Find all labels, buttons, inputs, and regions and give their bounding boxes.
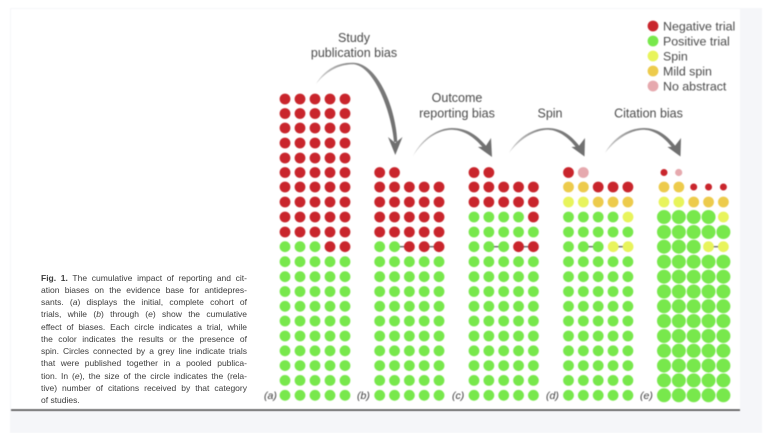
heading: study publication bias [311,31,397,60]
arrow: citation bias [605,128,681,156]
small pink no abstract trial [675,169,682,176]
spin trials [568,202,628,247]
spin trials [664,202,724,247]
pooled publication connectors [489,246,534,248]
green positive trials [380,247,439,395]
red negative trials [285,99,345,247]
caption text block: Fig. 1. The cumulative impact of reporting and cit- [41,272,247,282]
legend item: mild spin: Mild spin [663,64,712,78]
arrow: outcome reporting bias [413,128,492,157]
arrow: spin [509,128,585,156]
red negative trials [380,172,439,247]
arrow: study publication bias [316,63,402,155]
label b: (b) [357,390,370,402]
heading: outcome reporting bias: reporting bias [419,106,495,120]
caption text block: tion. In (e), the size of the circle indicates the (rela- [41,370,247,380]
legend item: no abstract: No abstract [663,80,727,94]
label d: (d) [546,390,559,402]
caption text block [41,272,247,405]
caption text block: that were published together in a pooled publica- [41,358,247,368]
heading: citation bias: Citation bias [614,106,683,120]
pooled publication connectors [394,246,439,248]
red negative trials [474,172,534,247]
green positive trials [285,247,345,395]
pooled publication connectors [584,246,628,248]
panel d: after spin [546,167,628,402]
label c: (c) [452,390,464,402]
large green positive trials [664,217,724,395]
caption text block: of studies. [41,395,80,405]
caption text block: ation biases on the evidence base for antidepres- [41,285,247,295]
caption text block: sants. (a) displays the initial, complete cohort of [41,297,247,307]
green positive trials [474,217,534,395]
heading: outcome reporting bias [419,91,495,120]
label a: (a) [264,390,277,402]
caption text block: effect of biases. Each circle indicates a trial, while [41,322,247,332]
heading: study publication bias: Study [338,31,371,45]
label e: (e) [640,390,653,402]
legend item: negative trial: Negative trial [663,20,735,34]
heading: study publication bias: publication bias [311,46,397,60]
panel e: after citation bias, circle size shows citations [640,169,724,402]
pooled publication connector [712,246,719,248]
caption text block: trials, while (b) through (e) show the cumulative [41,309,247,319]
legend item: positive trial: Positive trial [663,34,730,48]
legend [648,20,735,94]
panel a: initial complete cohort of trials [264,99,345,402]
mild spin trials [664,187,724,202]
legend item: spin: Spin [663,50,688,64]
small red negative trials [664,172,724,187]
heading: outcome reporting bias: Outcome [432,91,482,105]
caption text block: spin. Circles connected by a grey line indicate trials [41,346,247,356]
heading: spin: Spin [537,106,563,120]
panel c: after outcome reporting bias [452,172,534,402]
red negative trials [568,172,628,187]
caption text block: tive) number of citations received by that category [41,383,247,393]
mild spin trials [568,187,628,202]
pink no abstract trial [578,167,589,178]
panel b: after study publication bias [357,172,439,402]
caption text block: the color indicates the results or the presence of [41,334,247,344]
green positive trials [568,217,628,395]
